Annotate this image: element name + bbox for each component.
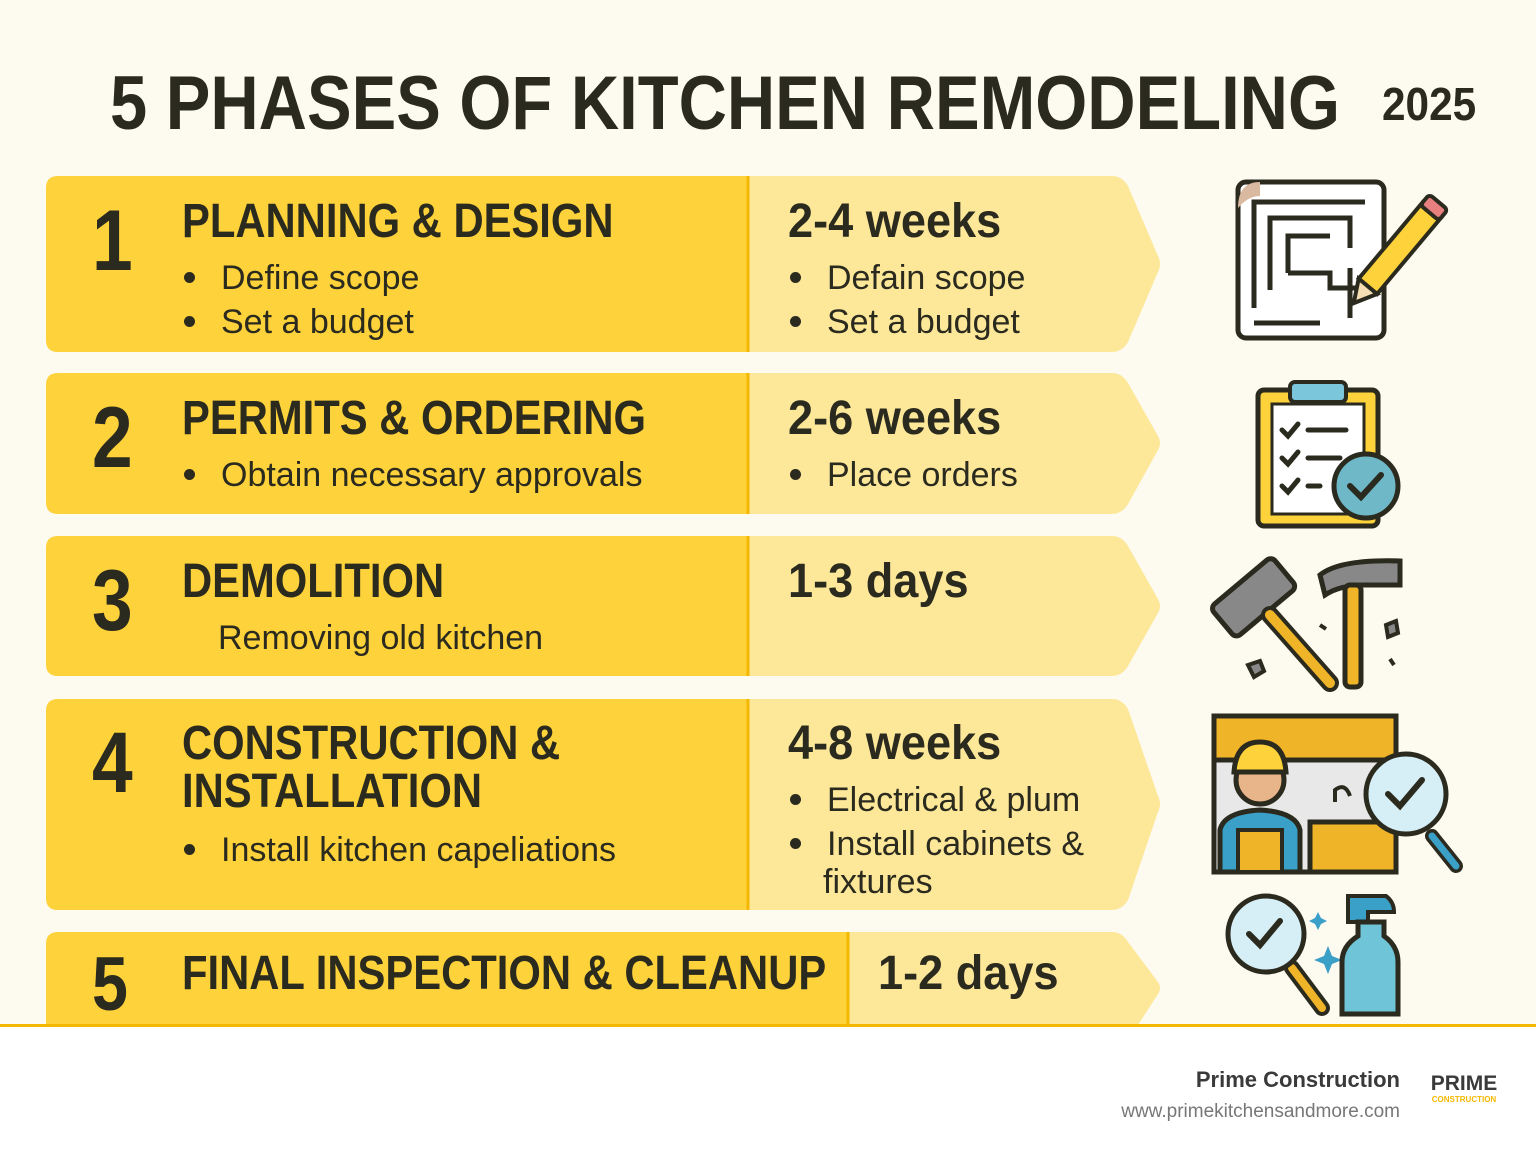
phase 2 text: PERMITS & ORDERING	[182, 392, 646, 445]
phase 4 duration: 4-8 weeks	[788, 717, 1001, 770]
phase 1 text: Set a budget	[221, 303, 414, 341]
phase 2 text	[92, 390, 646, 494]
icon: hammers	[1210, 556, 1402, 692]
phase 5 duration: 1-2 days	[878, 947, 1059, 1000]
icon: blueprint and pencil	[1236, 180, 1448, 340]
icon: clipboard checklist	[1256, 380, 1400, 528]
footer url: www.primekitchensandmore.com	[1121, 1101, 1400, 1122]
panel: phase 5 background	[46, 932, 1160, 1025]
phase 1 text: Define scope	[221, 259, 419, 297]
year: 2025	[1382, 78, 1476, 130]
phase 2 duration: 2-6 weeks	[788, 392, 1001, 445]
phase 3 text: DEMOLITION	[182, 555, 444, 608]
phase 1 duration	[788, 195, 1025, 341]
phase 5 text: FINAL INSPECTION & CLEANUP	[182, 947, 826, 1000]
phase 1 text	[92, 193, 614, 341]
phase 4 duration: Electrical & plum	[827, 781, 1080, 819]
phase 2 text: Obtain necessary approvals	[221, 456, 642, 494]
phase 3 text	[92, 553, 543, 657]
phase 2 duration: Place orders	[827, 456, 1018, 494]
icon: worker with kitchen and magnifier	[1212, 714, 1463, 874]
phase 1 duration: 2-4 weeks	[788, 195, 1001, 248]
phase 5 text: 5	[92, 942, 128, 1027]
logo: PRIME	[1431, 1072, 1497, 1095]
phase 4 duration: Install cabinets &	[827, 825, 1084, 863]
phase 5 text	[92, 942, 826, 1027]
footer company name: Prime Construction	[1196, 1067, 1400, 1092]
phase 4 text	[92, 715, 616, 869]
phase 4 duration	[788, 717, 1084, 901]
phase 1 text: 1	[92, 193, 133, 289]
phase 1 duration: Set a budget	[827, 303, 1020, 341]
icon: magnifier and spray bottle	[1226, 894, 1400, 1016]
title: 5 PHASES OF KITCHEN REMODELING	[110, 61, 1340, 146]
panel: phase 3 background	[46, 536, 1160, 676]
phase 1 duration: Defain scope	[827, 259, 1025, 297]
phase 3 text: 3	[92, 553, 133, 649]
panel: phase 1 background	[46, 176, 1160, 352]
panel: phase 2 background	[46, 373, 1160, 514]
footer	[0, 1024, 1536, 1154]
phase 2 duration	[788, 392, 1018, 494]
phase 1 text: PLANNING & DESIGN	[182, 195, 614, 248]
phase 3 duration: 1-3 days	[788, 555, 969, 608]
phase 4 text: Install kitchen capeliations	[221, 831, 616, 869]
phase 4 text: INSTALLATION	[182, 765, 482, 818]
phase 4 text: 4	[92, 715, 133, 811]
phase 4 duration: fixtures	[823, 863, 933, 901]
phase 3 text: Removing old kitchen	[218, 619, 543, 657]
panel: phase 4 background	[46, 699, 1160, 910]
logo: CONSTRUCTION	[1432, 1095, 1496, 1104]
phase 4 text: CONSTRUCTION &	[182, 717, 560, 770]
phase 2 text: 2	[92, 390, 133, 486]
